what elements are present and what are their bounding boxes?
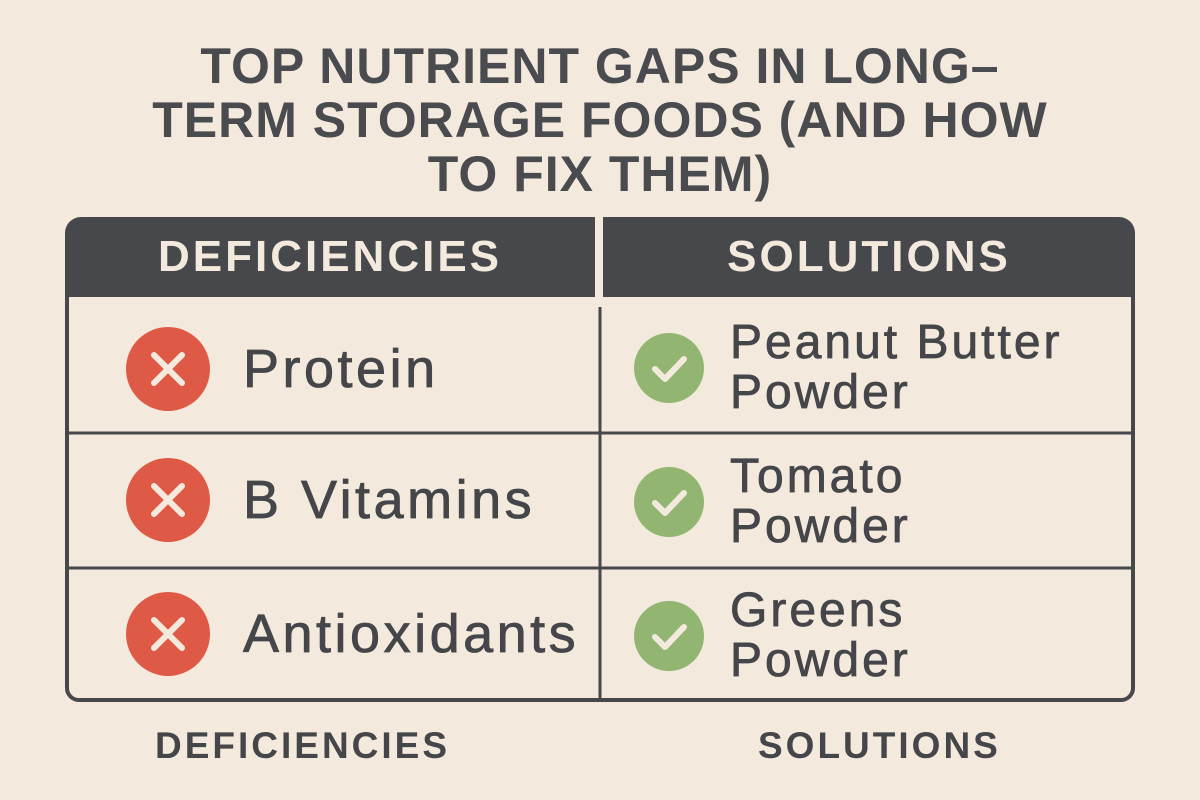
row 1 solution: peanut butter powder: Peanut Butter (730, 316, 1063, 369)
row 3 deficiency: antioxidants (126, 592, 579, 676)
row 1 deficiency: protein: Protein (243, 339, 439, 399)
title: TO FIX THEM) (428, 146, 772, 202)
header: solutions (603, 217, 1135, 297)
row 3 solution: greens powder: Greens (730, 584, 905, 637)
row 1 solution: peanut butter powder (634, 316, 1063, 419)
row 2 deficiency: b vitamins (126, 458, 535, 542)
footer label: deficiencies: DEFICIENCIES (155, 725, 450, 766)
row 2 solution: tomato powder: Powder (730, 500, 911, 553)
row 1 solution: peanut butter powder: Powder (730, 366, 911, 419)
row 2 deficiency: b vitamins: B Vitamins (243, 470, 535, 530)
title: TOP NUTRIENT GAPS IN LONG– (200, 38, 1000, 94)
header: deficiencies (65, 217, 595, 297)
row 3 deficiency: antioxidants: Antioxidants (243, 604, 579, 664)
row 3 solution: greens powder (634, 584, 911, 687)
row 1 deficiency: protein (126, 327, 439, 411)
footer label: solutions: SOLUTIONS (758, 725, 1001, 766)
header: solutions: SOLUTIONS (727, 232, 1011, 281)
row 2 solution: tomato powder (634, 450, 911, 553)
row 2 solution: tomato powder: Tomato (730, 450, 905, 503)
header: deficiencies: DEFICIENCIES (158, 232, 502, 281)
title (152, 38, 1048, 202)
row 3 solution: greens powder: Powder (730, 634, 911, 687)
title: TERM STORAGE FOODS (AND HOW (152, 92, 1048, 148)
